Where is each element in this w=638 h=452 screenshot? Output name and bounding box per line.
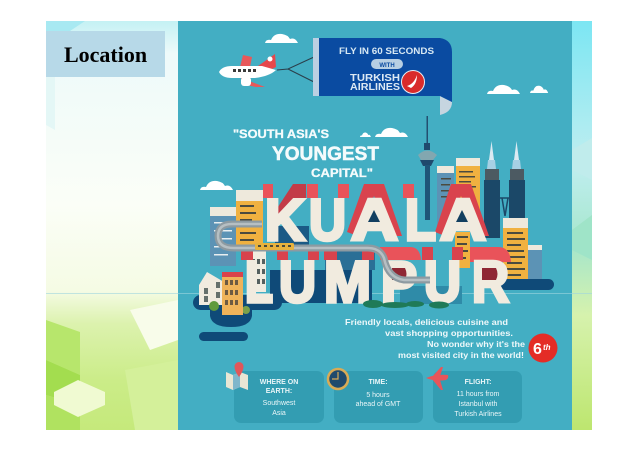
elevated road bbox=[218, 224, 430, 280]
card: where on earth: Southwest bbox=[263, 400, 295, 407]
title: LUMPUR: R bbox=[472, 250, 509, 315]
card: where on earth: EARTH: bbox=[266, 388, 292, 395]
banner: Turkish Airlines: WITH bbox=[379, 63, 395, 69]
card: where on earth bbox=[234, 371, 324, 423]
description text: vast shopping opportunities. bbox=[385, 328, 513, 338]
heading: Location: Location bbox=[64, 42, 147, 67]
title: KUALA: U bbox=[309, 188, 346, 253]
banner: Turkish Airlines: FLY IN 60 SECONDS bbox=[339, 46, 434, 56]
icon: map pin bbox=[226, 362, 248, 390]
airplane towing banner bbox=[219, 54, 314, 87]
card: where on earth: Asia bbox=[272, 410, 286, 417]
heading: Location bbox=[46, 31, 165, 77]
title: LUMPUR: P bbox=[381, 250, 417, 315]
title: KUALA: A bbox=[440, 188, 486, 253]
tagline bbox=[233, 127, 379, 180]
poster panel bbox=[46, 21, 592, 430]
dark water behind letters bbox=[193, 226, 462, 341]
skyline: upper right bbox=[418, 116, 554, 290]
title: KUALA: A bbox=[351, 188, 398, 253]
icon: plane bbox=[426, 367, 448, 390]
title: KUALA bbox=[263, 184, 489, 253]
tagline: "SOUTH ASIA'S bbox=[233, 127, 329, 141]
badge: 6th bbox=[528, 334, 558, 362]
skyline: upper left bbox=[210, 190, 266, 292]
clouds bbox=[200, 34, 548, 190]
description text: No wonder why it's the bbox=[427, 339, 525, 349]
card: time: TIME: bbox=[368, 379, 388, 386]
card: time: 5 hours bbox=[366, 392, 390, 399]
slide background bbox=[46, 21, 592, 430]
tagline: CAPITAL" bbox=[311, 168, 373, 180]
card: flight: Istanbul with bbox=[459, 401, 498, 408]
title: LUMPUR: U bbox=[279, 250, 316, 315]
card: flight: Turkish Airlines bbox=[454, 411, 502, 418]
title: KUALA: L bbox=[405, 188, 436, 253]
card: flight bbox=[433, 371, 522, 423]
title: KUALA: K bbox=[265, 188, 305, 253]
title: LUMPUR bbox=[241, 247, 511, 315]
banner: Turkish Airlines: TURKISH bbox=[350, 73, 400, 84]
description text bbox=[345, 317, 525, 360]
badge: 6th: 6 bbox=[533, 341, 542, 358]
badge: 6th: th bbox=[543, 343, 551, 352]
card: where on earth: WHERE ON bbox=[260, 379, 298, 386]
card: flight: 11 hours from bbox=[457, 391, 499, 398]
tagline: YOUNGEST bbox=[272, 144, 379, 165]
title: LUMPUR: U bbox=[424, 250, 461, 315]
card: time: ahead of GMT bbox=[356, 401, 401, 408]
banner: Turkish Airlines: AIRLINES bbox=[350, 82, 400, 93]
bushes bbox=[363, 300, 449, 308]
description text: most visited city in the world! bbox=[398, 350, 524, 360]
banner: Turkish Airlines bbox=[313, 38, 452, 115]
description text: Friendly locals, delicious cuisine and bbox=[345, 317, 508, 327]
houses bbox=[199, 272, 250, 315]
card: flight: FLIGHT: bbox=[465, 379, 491, 386]
train bbox=[255, 243, 294, 250]
icon: clock bbox=[328, 369, 348, 389]
title: LUMPUR: M bbox=[324, 250, 371, 315]
card: time bbox=[334, 371, 423, 423]
title: LUMPUR: L bbox=[245, 250, 273, 315]
